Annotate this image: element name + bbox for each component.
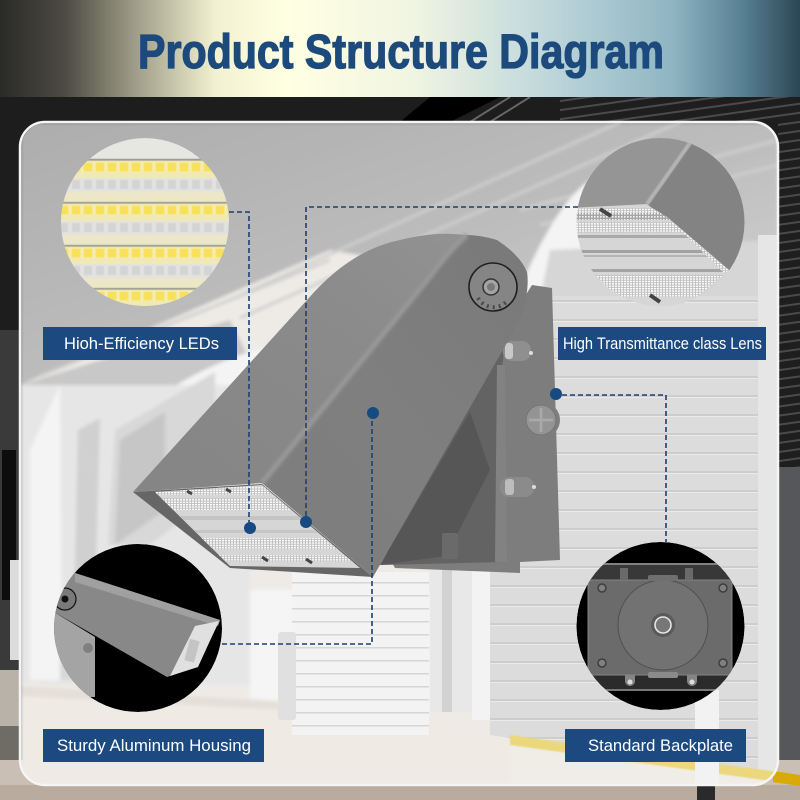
lens	[155, 485, 360, 568]
upper screw	[503, 341, 533, 361]
leader: lens	[300, 207, 578, 528]
lens frame	[133, 484, 373, 577]
title banner	[0, 0, 800, 97]
leader: LEDs	[229, 212, 256, 534]
product: wall pack light	[133, 234, 560, 577]
label: housing	[43, 729, 264, 762]
label: LEDs	[43, 327, 237, 360]
adjust knob	[469, 263, 517, 311]
lens close-up circle	[576, 138, 744, 304]
label: backplate	[565, 729, 746, 762]
LED close-up circle	[58, 138, 234, 309]
label: lens	[558, 327, 766, 360]
label: LEDs: Hioh-Efficiency LEDs	[64, 334, 219, 353]
mount boss	[524, 402, 560, 438]
leader: backplate	[550, 388, 666, 542]
backplate	[385, 285, 560, 573]
backplate close-up circle	[576, 542, 745, 710]
panel border	[20, 122, 778, 785]
housing: left side face	[133, 234, 470, 492]
housing close-up circle	[54, 544, 222, 712]
leader: housing	[222, 407, 379, 644]
label: housing: Sturdy Aluminum Housing	[57, 736, 251, 755]
label: lens: High Transmittance class Lens	[563, 334, 762, 353]
label: backplate: Standard Backplate	[588, 736, 733, 755]
housing: front face	[262, 235, 528, 577]
title: Product Structure Diagram	[138, 26, 664, 79]
lower screw	[500, 477, 536, 497]
interior shadow	[380, 340, 505, 565]
